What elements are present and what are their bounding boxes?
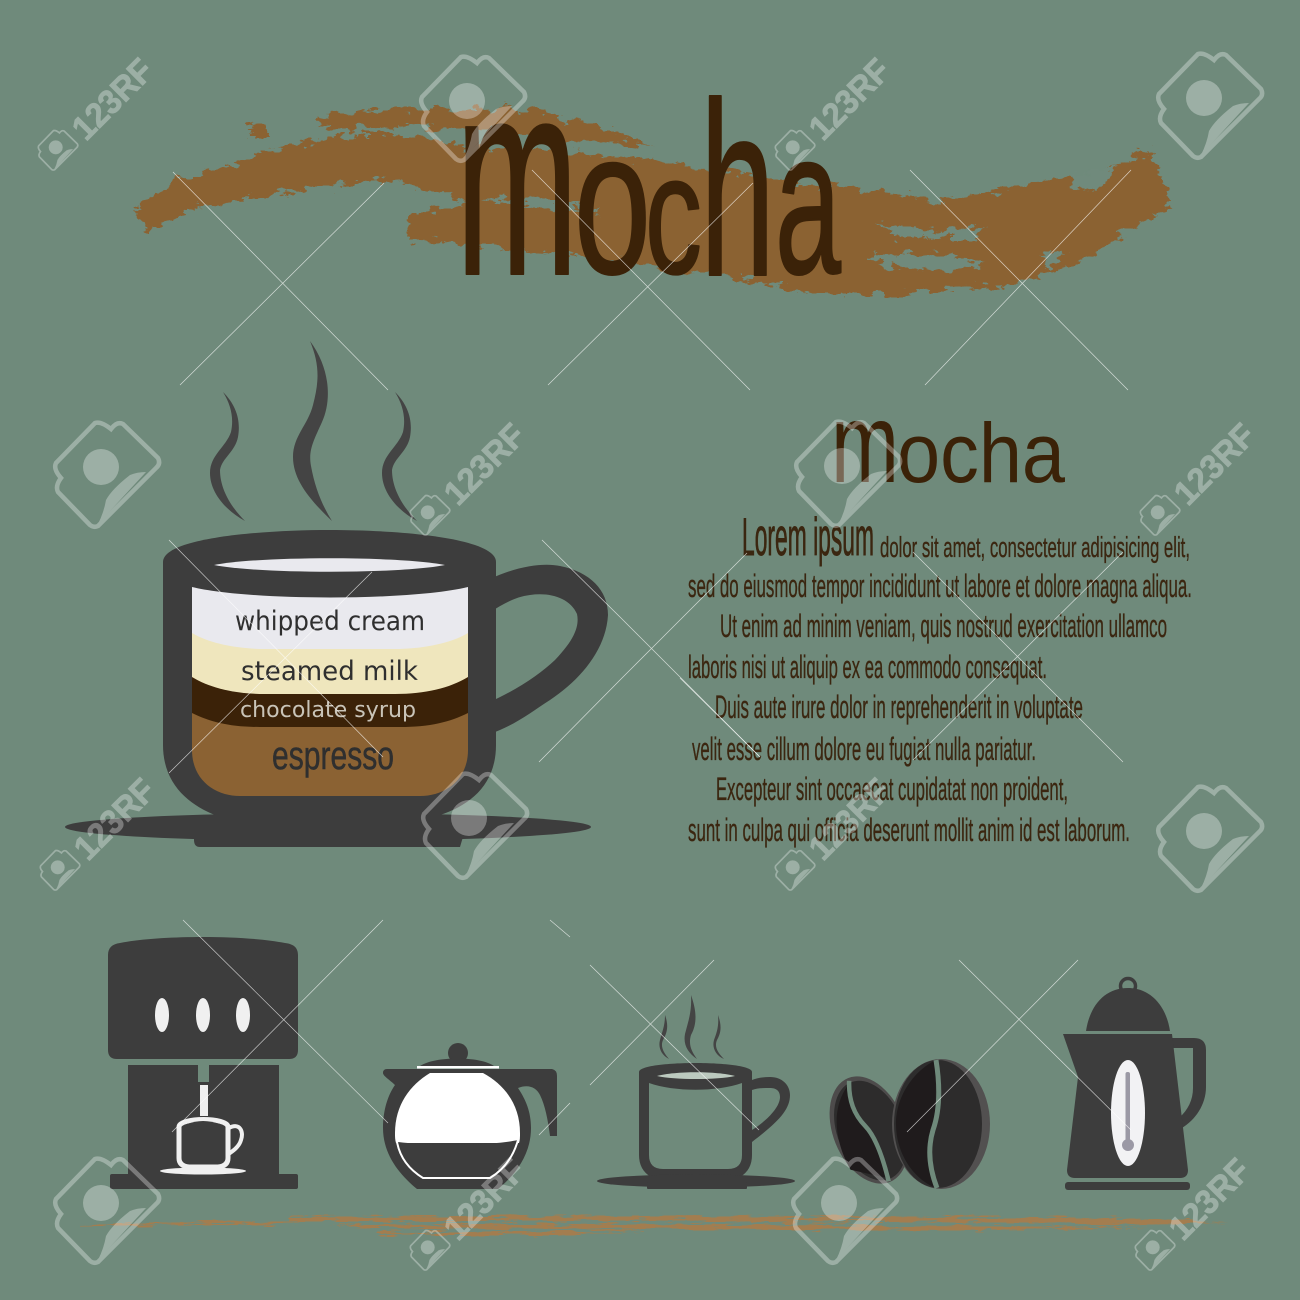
layer: steamed milk xyxy=(192,625,468,694)
body text xyxy=(688,508,1192,848)
saucer xyxy=(65,813,591,847)
steam xyxy=(210,341,417,521)
cup body xyxy=(163,530,496,815)
watermark: 123RF logos: 123RF xyxy=(67,771,163,868)
watermark: diagonal hairlines xyxy=(169,170,1131,1135)
icon: coffee cup with steam xyxy=(597,995,795,1189)
cup opening xyxy=(214,558,445,572)
icon: coffee beans xyxy=(815,1059,990,1195)
title: Mocha: o xyxy=(574,88,651,317)
label: chocolate syrup: chocolate syrup xyxy=(240,698,416,723)
watermark: 123RF logos: 123RF xyxy=(1167,416,1263,513)
title: Mocha: m xyxy=(456,22,578,333)
brush stroke at the bottom xyxy=(80,1216,1228,1235)
body text: Lorem ipsum xyxy=(742,508,874,567)
cup handle xyxy=(490,565,608,734)
main cup illustration xyxy=(65,341,608,847)
title: Mocha: a xyxy=(775,88,842,317)
sub heading: Mocha: m xyxy=(831,380,899,506)
watermark: 123RF logos: 123RF xyxy=(1162,1151,1258,1248)
label: whipped cream: whipped cream xyxy=(235,606,425,637)
watermark: 123RF logos: 123RF xyxy=(65,51,161,148)
watermark: 123RF logos: 123RF xyxy=(802,771,898,868)
watermark: 123RF logos: 123RF xyxy=(802,51,898,148)
brush stroke behind title xyxy=(132,108,1172,294)
title: Mocha: h xyxy=(700,52,775,328)
label: espresso: espresso xyxy=(272,734,394,778)
layer: whipped cream xyxy=(192,587,468,649)
label: steamed milk: steamed milk xyxy=(241,656,418,687)
watermark: 123RF logos: 123RF xyxy=(437,416,533,513)
icon: espresso machine xyxy=(108,937,298,1189)
icon: glass coffee pot xyxy=(383,1043,557,1189)
title: Mocha xyxy=(456,22,842,333)
watermark: 123RF logos: 123RF xyxy=(437,1151,533,1248)
sub heading: Mocha xyxy=(831,380,1065,506)
sub heading: Mocha: ocha xyxy=(897,406,1065,500)
layer: chocolate syrup xyxy=(192,670,468,727)
icon: coffee percolator xyxy=(1063,978,1206,1190)
title: Mocha: c xyxy=(645,120,702,310)
layer: espresso xyxy=(192,700,468,796)
